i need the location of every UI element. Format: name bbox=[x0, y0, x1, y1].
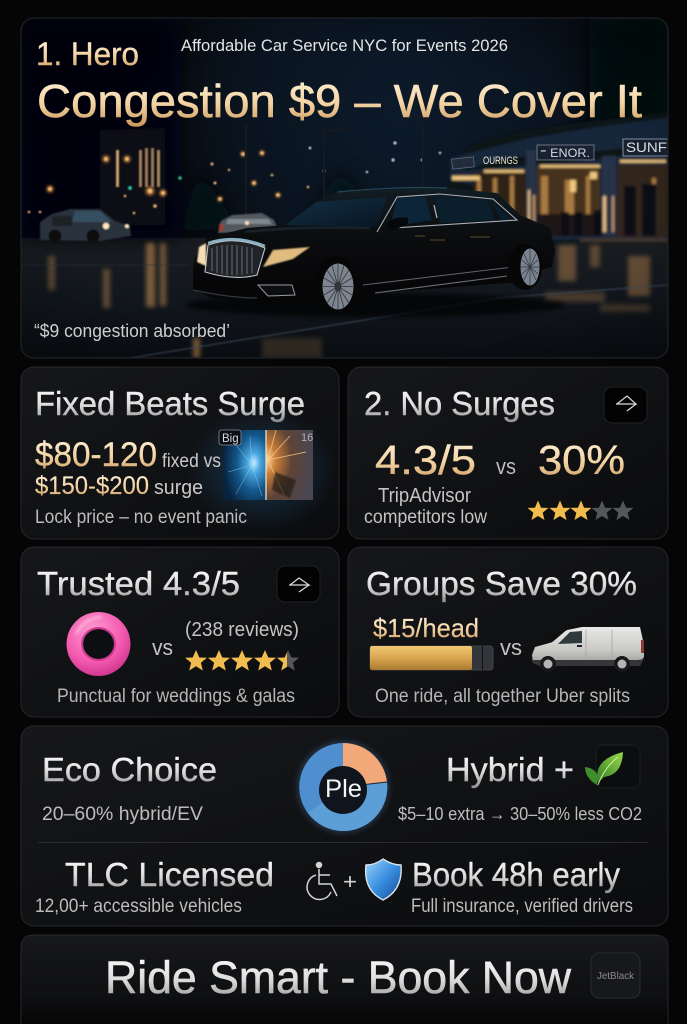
note: Lock price – no event panic bbox=[35, 507, 247, 528]
panel: groups save bbox=[348, 547, 668, 717]
vs: vs bbox=[500, 635, 522, 660]
eco stat: 20–60% hybrid/EV bbox=[42, 804, 203, 825]
background cars bbox=[40, 209, 278, 242]
heading: eco choice: Eco Choice bbox=[42, 751, 217, 788]
source label: TripAdvisor bbox=[378, 485, 471, 507]
heading: 2. No Surges bbox=[364, 385, 555, 422]
left building lights bbox=[116, 148, 160, 187]
star rating: 4.3 of 5 bbox=[185, 650, 299, 670]
venue signs: SUNF bbox=[626, 139, 667, 155]
logo badge bbox=[591, 953, 640, 998]
heading: Groups Save 30% bbox=[366, 565, 637, 602]
heading: Fixed Beats Surge bbox=[35, 385, 305, 422]
wet road reflections bbox=[48, 243, 650, 358]
label: 1. Hero: 1. Hero bbox=[36, 36, 139, 72]
vs: vs bbox=[496, 454, 516, 479]
accessible vehicles stat: 12,00+ accessible vehicles bbox=[35, 896, 242, 917]
icon: arrow button bbox=[604, 387, 647, 423]
icon: white van bbox=[532, 627, 644, 672]
icon: arrow button bbox=[277, 566, 320, 602]
surge price: $150-$200 bbox=[35, 472, 149, 500]
panel: eco and licensing bbox=[21, 726, 668, 926]
street bokeh lights bbox=[46, 150, 281, 202]
image: split price burst bbox=[196, 416, 328, 524]
plus: + bbox=[343, 869, 357, 894]
competitors label: competitors low bbox=[364, 507, 487, 528]
surge label: surge bbox=[154, 477, 203, 499]
rating stat: 4.3/5 bbox=[375, 437, 476, 483]
price per head: $15/head bbox=[373, 613, 479, 643]
fixed price: $80-120 bbox=[35, 436, 157, 474]
caption: “$9 congestion absorbed’ bbox=[34, 321, 230, 341]
venue signs bbox=[483, 142, 666, 164]
icon: pink ring bbox=[66, 612, 130, 676]
panel: hero bbox=[21, 18, 669, 358]
limo wheels bbox=[322, 248, 542, 310]
fixed vs label: fixed vs bbox=[162, 451, 221, 472]
left building bbox=[100, 128, 165, 225]
icon: wheelchair bbox=[307, 862, 337, 899]
panel: call to action bbox=[21, 935, 668, 1024]
panel: trusted bbox=[21, 547, 339, 717]
note: One ride, all together Uber splits bbox=[375, 686, 630, 707]
heading: hybrid: Hybrid + bbox=[446, 751, 574, 788]
icon: leaf bbox=[585, 745, 640, 788]
limo headlights bbox=[263, 247, 310, 267]
star rating: 3 of 5 bbox=[528, 500, 634, 520]
panel: no surges bbox=[348, 367, 668, 539]
heading: TLC licensed: TLC Licensed bbox=[65, 856, 274, 893]
call to action text: Ride Smart - Book Now bbox=[105, 952, 571, 1003]
progress bar bbox=[370, 646, 493, 670]
vs: vs bbox=[152, 635, 173, 660]
heading: Trusted 4.3/5 bbox=[37, 565, 240, 602]
subtitle: Affordable Car Service NYC for Events 2026 bbox=[181, 36, 508, 55]
venue signs: ⁼ ENOR. bbox=[540, 146, 590, 160]
panel: fixed beats surge bbox=[21, 367, 339, 539]
eco detail: $5–10 extra → 30–50% less CO2 bbox=[398, 804, 642, 824]
insurance note: Full insurance, verified drivers bbox=[411, 896, 633, 917]
right venue building bbox=[450, 112, 668, 243]
venue signs: OURNGS bbox=[483, 155, 518, 167]
review count: (238 reviews) bbox=[185, 619, 299, 641]
donut chart: Ple bbox=[325, 775, 362, 803]
hero night street scene bbox=[21, 18, 669, 358]
logo badge: JetBlack bbox=[597, 971, 635, 982]
note: Punctual for weddings & galas bbox=[57, 686, 295, 707]
donut chart bbox=[296, 740, 390, 834]
image: split price burst: 16 bbox=[301, 432, 313, 444]
image: split price burst: Big bbox=[222, 433, 239, 445]
icon: shield bbox=[366, 859, 401, 900]
heading: book early: Book 48h early bbox=[412, 856, 620, 893]
limo grille bbox=[205, 241, 265, 277]
lamp posts bbox=[246, 117, 430, 215]
percent stat: 30% bbox=[538, 437, 625, 483]
limousine bbox=[185, 188, 565, 317]
main headline: Congestion $9 – We Cover It bbox=[37, 75, 642, 127]
